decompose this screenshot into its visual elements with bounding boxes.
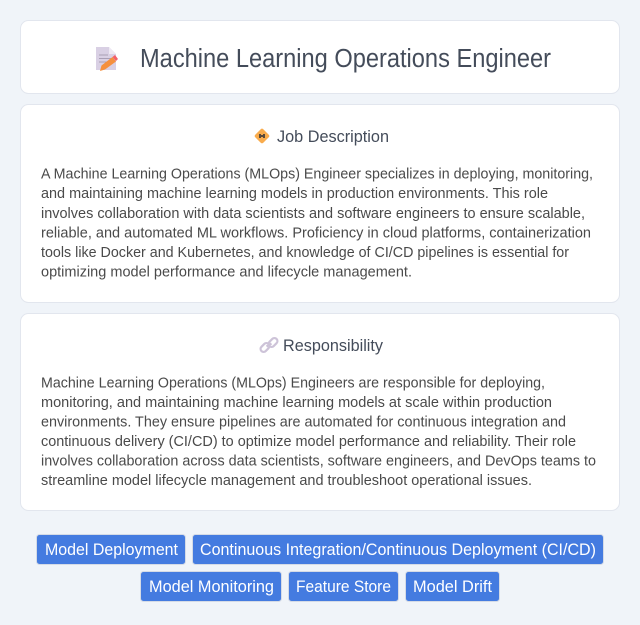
text block: job description: involves collaboration with data scientists and software engineers to ensure scalable,: [41, 206, 585, 222]
icon: orange diamond: [254, 128, 270, 144]
tag: model drift: [406, 572, 500, 602]
text block: job description: A Machine Learning Operations (MLOps) Engineer specializes in deploying, monitoring,: [41, 166, 593, 182]
text block: job description: tools like Docker and Kubernetes, and knowledge of CI/CD pipelines is essential for: [41, 245, 569, 261]
text block: job description: reliable, and automated ML workflows. Proficiency in cloud platforms, containerization: [41, 226, 591, 242]
tag: feature store: [288, 572, 398, 602]
heading: job description: Job Description: [277, 128, 389, 146]
panel: responsibility: [20, 314, 620, 510]
heading: responsibility: Responsibility: [283, 337, 384, 355]
text block: job description: [41, 166, 593, 280]
title: Machine Learning Operations Engineer: [140, 45, 551, 73]
tag: model deployment: [36, 534, 186, 564]
text block: responsibility: continuous delivery (CI/CD) to optimize model performance and reliability. Their role: [41, 434, 576, 450]
tag: model drift: Model Drift: [413, 578, 492, 596]
tag: CI/CD: Continuous Integration/Continuous Deployment (CI/CD): [200, 541, 596, 559]
text block: responsibility: [41, 376, 596, 489]
tag: model monitoring: [140, 572, 282, 602]
text block: responsibility: monitoring, and maintaining machine learning models at scale within production: [41, 395, 552, 411]
tag: model monitoring: Model Monitoring: [149, 578, 274, 596]
tag: model deployment: Model Deployment: [45, 541, 178, 559]
text block: responsibility: involves collaboration across data scientists, software engineers, and DevOps teams to: [41, 454, 596, 470]
tags: [36, 534, 604, 602]
icon: chain link: [259, 337, 279, 353]
text block: responsibility: Machine Learning Operations (MLOps) Engineers are responsible for deploying,: [41, 376, 545, 392]
text block: responsibility: streamline model lifecycle management and troubleshoot operational issues.: [41, 473, 532, 489]
icon: document with pencil: [96, 47, 118, 71]
header panel: [20, 20, 620, 94]
text block: job description: and maintaining machine learning models in production environments. This role: [41, 186, 548, 202]
text block: job description: optimizing model performance and lifecycle management.: [41, 264, 412, 280]
panel: job description: [20, 104, 620, 302]
tag: feature store: Feature Store: [296, 578, 391, 596]
text block: responsibility: environments. They ensure pipelines are automated for continuous integration and: [41, 414, 566, 430]
tag: CI/CD: [192, 534, 604, 564]
